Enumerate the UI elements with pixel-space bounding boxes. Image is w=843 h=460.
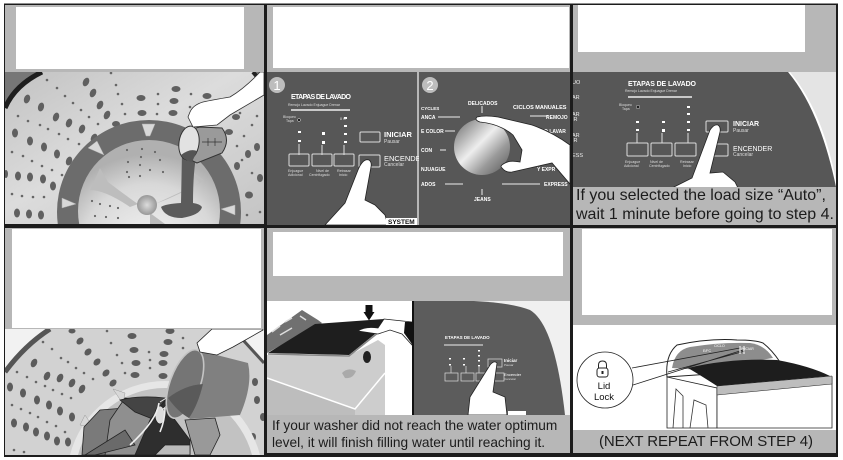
control panel sub-image 1: Cancelar xyxy=(384,162,404,168)
illustration: control panel with finger on start: Nivel de xyxy=(650,160,663,164)
washer console xyxy=(267,310,322,353)
icon: down arrow xyxy=(364,305,374,320)
illustration: control panel with finger on start: ENCENDER xyxy=(733,146,772,153)
icon: bucket xyxy=(166,349,250,419)
control panel sub-image 1: Adicional xyxy=(288,173,303,177)
illustration: control panel with finger on start: Retrasar xyxy=(680,160,695,164)
knob panel sub-image 2: LO LAVAR xyxy=(541,129,566,135)
washer lid xyxy=(268,319,384,355)
control panel sub-image 1: Enjuague xyxy=(288,169,303,173)
illustration: control panel with finger on start: Remojo Lavado Enjuague Drenar xyxy=(625,89,678,93)
panel: step 6 lid lock xyxy=(573,228,836,453)
blank caption box 5 xyxy=(273,232,563,276)
knob panel sub-image 2: E COLOR xyxy=(421,129,444,135)
control panel sub-image 1: Inicio xyxy=(339,173,347,177)
illustration: detergent poured into drum xyxy=(5,72,264,224)
control panel sub-image 1: Centrifugado xyxy=(309,173,330,177)
illustration: control panel with finger on start: IR xyxy=(572,117,578,123)
knob panel sub-image 2: CICLOS MANUALES xyxy=(513,105,567,111)
illustration: control panel with finger: Encender xyxy=(504,372,522,377)
icon: selector knob xyxy=(454,119,510,175)
control panel sub-image 1: Retrasar xyxy=(337,169,352,173)
illustration: control panel with finger on start: Pausar xyxy=(733,128,749,134)
blank caption box 4 xyxy=(12,229,261,328)
knob panel sub-image 2 xyxy=(419,72,570,225)
illustration: control panel with finger on start: UO xyxy=(572,80,581,86)
illustration: control panel with finger: Iniciar xyxy=(504,358,518,363)
note: load size auto xyxy=(575,187,834,223)
knob panel sub-image 2: CON xyxy=(421,148,432,154)
illustration: control panel with finger on start: AR xyxy=(572,95,580,101)
illustration: control panel with finger xyxy=(412,300,570,415)
control panel sub-image 1: Bloqueo xyxy=(283,115,296,119)
clothes pile xyxy=(82,397,220,455)
illustration: control panel with finger: Cancelar xyxy=(504,377,516,381)
knob panel sub-image 2: REMOJO xyxy=(546,115,568,121)
control panel sub-image 1: Nivel de xyxy=(316,169,329,173)
illustration: control panel with finger on start: INICIAR xyxy=(733,121,759,128)
illustration: control panel with finger on start: IR xyxy=(572,138,578,144)
illustration: control panel with finger on start xyxy=(572,72,836,188)
illustration: control panel with finger on start: Adicional xyxy=(624,164,639,168)
knob panel sub-image 2: NJUAGUE xyxy=(421,167,446,173)
illustration: control panel with finger: Pausar xyxy=(504,363,514,367)
note: water optimum level: If your washer did not reach the water optimum xyxy=(272,418,557,433)
knob panel sub-image 2: DELICADOS xyxy=(468,101,498,107)
illustration: control panel with finger on start: ETAPAS DE LAVADO xyxy=(628,81,697,88)
note: load size auto: wait 1 minute before going to step 4. xyxy=(575,206,834,223)
blank caption box 2 xyxy=(273,7,569,68)
note: load size auto: If you selected the load size “Auto”, xyxy=(576,187,826,204)
illustration: control panel with finger on start: AR xyxy=(572,112,580,118)
control panel sub-image 1: INICIAR xyxy=(384,130,412,139)
knob panel sub-image 2: ADOS xyxy=(421,182,436,188)
illustration: closing washer lid xyxy=(267,301,412,415)
control panel sub-image 1: Remojo Lavado Enjuague Drenar xyxy=(288,103,341,107)
knob panel sub-image 2: Y EXPR xyxy=(537,167,556,173)
illustration: control panel with finger on start: Centrifugado xyxy=(649,164,670,168)
panel: step 2 control panel and knob xyxy=(267,5,570,226)
icon: finger pressing button xyxy=(325,160,388,225)
control panel sub-image 1: 8 hr xyxy=(340,117,347,121)
panel: step 1 pour detergent xyxy=(5,5,264,224)
control panel sub-image 1: 1 xyxy=(273,78,281,93)
icon: finger pressing button xyxy=(468,362,507,415)
icon: hand on knob xyxy=(476,116,570,184)
blank caption box 1 xyxy=(16,7,244,69)
illustration: washer with lid lock indicator: E/FC xyxy=(703,349,711,353)
icon: measuring cup xyxy=(177,125,226,163)
control panel sub-image 1: Tapa xyxy=(286,119,294,123)
note: next repeat from step 4: (NEXT REPEAT FROM STEP 4) xyxy=(599,433,813,450)
icon: pouring liquid stream xyxy=(161,152,202,218)
knob panel sub-image 2: CYCLES xyxy=(421,106,439,111)
knob panel sub-image 2: EXPRESS xyxy=(544,182,568,188)
label: system xyxy=(386,218,417,225)
knob panel sub-image 2: 2 xyxy=(426,78,434,93)
illustration: control panel with finger on start: Tapa xyxy=(622,107,630,111)
icon: padlock xyxy=(597,361,608,377)
control panel sub-image 1 xyxy=(267,72,427,226)
control panel sub-image 1: SYSTEM xyxy=(388,219,415,226)
illustration: control panel with finger on start: Bloqueo xyxy=(619,103,632,107)
illustration: washer with lid lock indicator: CICLO xyxy=(714,344,725,348)
panel: step 5 close lid and press start xyxy=(267,228,570,453)
illustration: control panel with finger on start: Enjuague xyxy=(625,160,640,164)
panel: step 3 press start xyxy=(572,5,836,225)
icon: hand on bucket xyxy=(197,329,263,355)
control panel sub-image 1: ETAPAS DE LAVADO xyxy=(291,94,352,101)
illustration: control panel with finger on start: AR xyxy=(572,133,580,139)
hand on lid xyxy=(358,319,412,345)
note: water optimum level xyxy=(272,418,557,450)
illustration: control panel with finger on start: Inicio xyxy=(683,164,691,168)
panel: step 4 add water xyxy=(5,228,266,455)
lid lock callout: Lid xyxy=(598,381,610,392)
blank caption box 3 xyxy=(578,5,805,52)
illustration: control panel with finger on start: ESS xyxy=(572,153,583,159)
knob panel sub-image 2: JEANS xyxy=(474,197,491,203)
illustration: washer with lid lock indicator xyxy=(573,325,836,430)
blank caption box 6 xyxy=(582,229,832,315)
icon: finger pressing start xyxy=(672,125,738,188)
lid lock callout xyxy=(577,352,633,408)
knob panel sub-image 2: ANCA xyxy=(421,115,436,121)
lid lock callout: Lock xyxy=(594,392,614,403)
control panel sub-image 1: ENCENDER xyxy=(384,154,427,163)
note: water optimum level: level, it will finish filling water until reaching it. xyxy=(272,435,545,450)
illustration: control panel with finger on start: Cancelar xyxy=(733,152,753,158)
illustration: washer with lid lock indicator: INICIAR xyxy=(741,347,754,351)
illustration: water poured from bucket over clothes xyxy=(5,328,266,455)
icon: hand holding cup xyxy=(188,72,264,127)
illustration: control panel with finger: ETAPAS DE LAVADO xyxy=(445,335,490,340)
control panel sub-image 1: Pausar xyxy=(384,139,400,145)
